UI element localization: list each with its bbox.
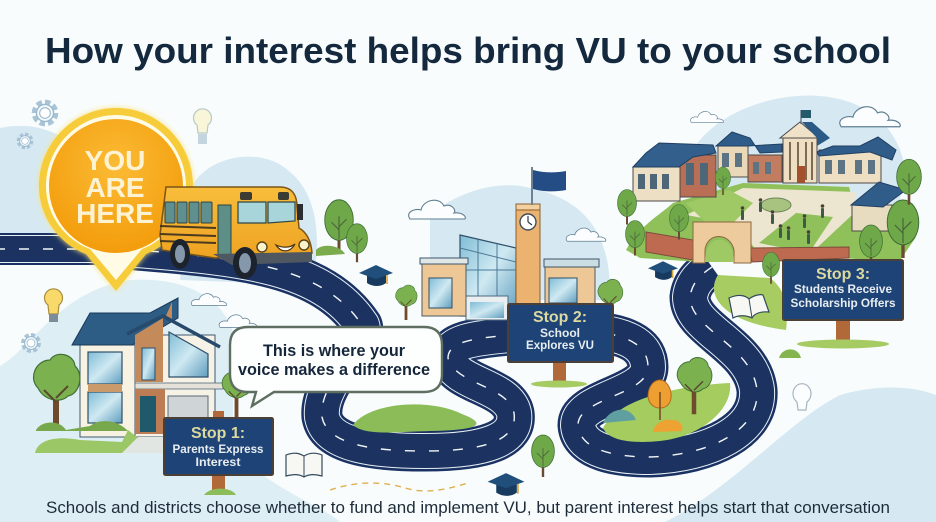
sign: stop 3: Scholarship Offers bbox=[790, 296, 896, 310]
inner road greens bbox=[353, 275, 787, 442]
sign: stop 3: Stop 3: bbox=[816, 266, 870, 283]
trees and bushes in the route bbox=[316, 200, 801, 477]
campus bbox=[618, 110, 921, 284]
sign: stop 3: Students Receive bbox=[794, 282, 892, 296]
icon: open books bbox=[286, 295, 769, 477]
title: How your interest helps bring VU to your school bbox=[45, 30, 891, 71]
icon: gears and bulbs bbox=[18, 102, 811, 410]
school building bbox=[396, 167, 623, 320]
speech callout: This is where your bbox=[263, 342, 406, 360]
house bbox=[34, 298, 252, 453]
sign: stop 1: Parents Express bbox=[172, 442, 264, 456]
sign: stop 1 bbox=[164, 411, 273, 495]
sign: stop 1: Stop 1: bbox=[191, 425, 245, 442]
school bus bbox=[160, 187, 312, 279]
caption: Schools and districts choose whether to fund and implement VU, but parent interest helps start that conversation bbox=[46, 498, 890, 517]
sign: stop 2: Explores VU bbox=[526, 338, 594, 352]
location pin: you are here: YOU bbox=[85, 145, 145, 176]
sign: stop 3 bbox=[783, 260, 903, 348]
sign: stop 2: Stop 2: bbox=[533, 309, 587, 326]
icon: graduation caps bbox=[359, 261, 678, 496]
speech callout bbox=[230, 327, 442, 406]
sign: stop 1: Interest bbox=[196, 455, 240, 469]
foreground plants bbox=[204, 489, 236, 495]
clouds bbox=[191, 107, 900, 327]
location pin: you are here: ARE bbox=[85, 172, 145, 203]
location pin: you are here bbox=[39, 108, 193, 291]
location pin: you are here: HERE bbox=[76, 198, 154, 229]
speech callout: voice makes a difference bbox=[238, 361, 430, 379]
sign: stop 2 bbox=[508, 304, 613, 388]
dashed flight path bbox=[330, 483, 468, 491]
road: winding route bbox=[0, 249, 757, 457]
sign: stop 2: School bbox=[540, 326, 580, 340]
